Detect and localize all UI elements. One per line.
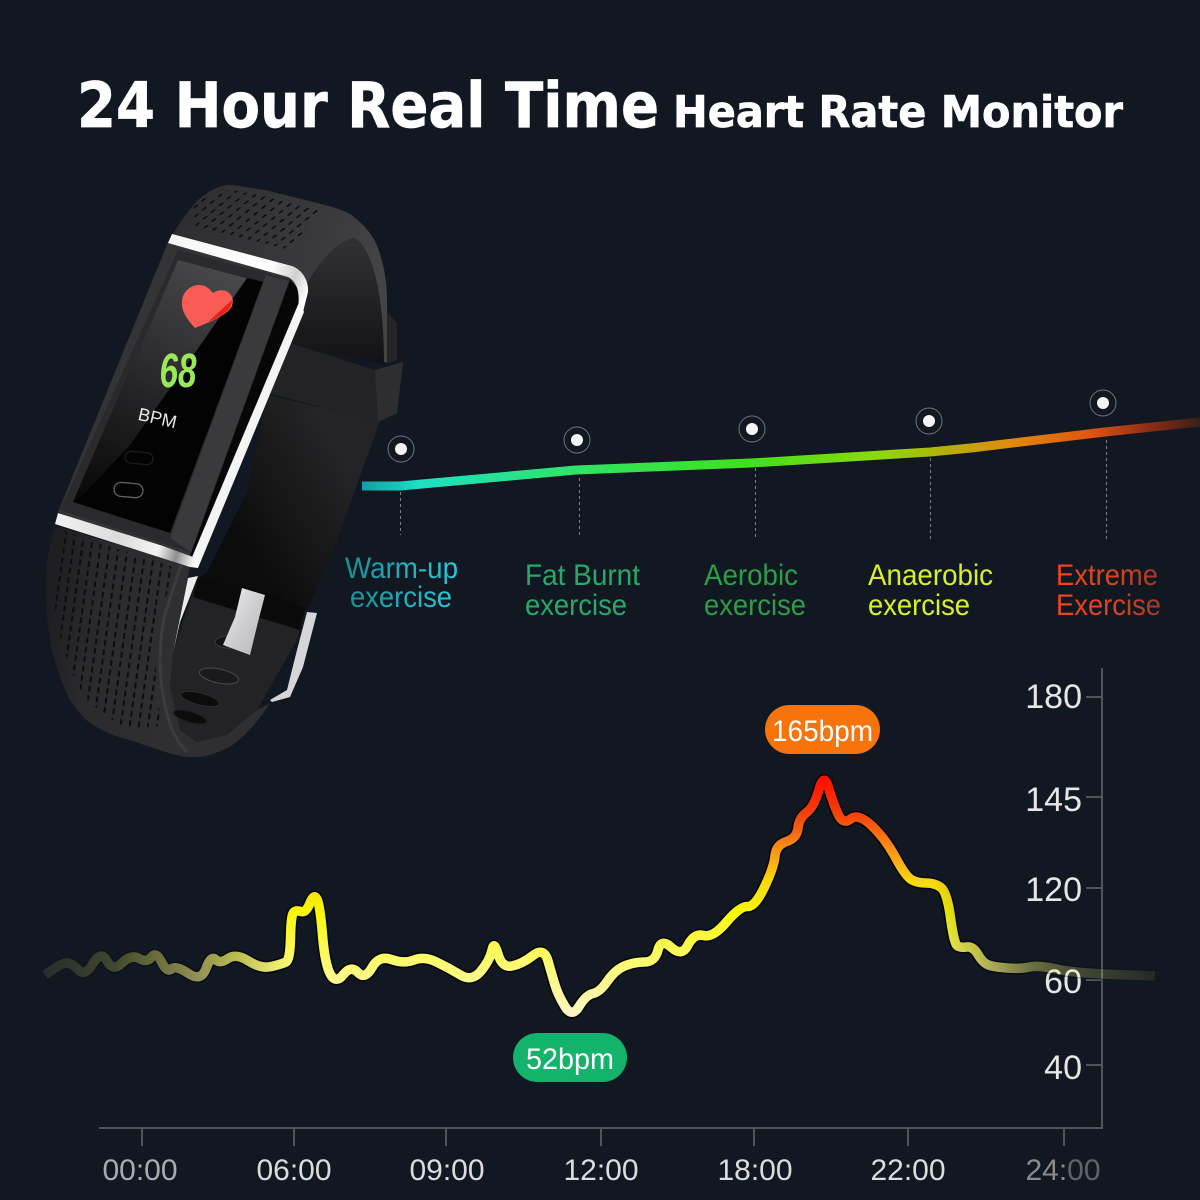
callout: 52bpm low: 52bpm xyxy=(526,1043,614,1076)
dashed drop lines xyxy=(400,440,1106,540)
label: fat burnt exercise: Fat Burnt xyxy=(525,559,641,592)
label: anaerobic exercise: exercise xyxy=(868,589,970,622)
title xyxy=(77,69,1123,142)
side dark strip xyxy=(190,280,305,566)
watch module body xyxy=(58,242,304,566)
zone markers xyxy=(388,390,1116,462)
white side edge xyxy=(190,300,304,568)
heart icon xyxy=(182,285,233,328)
BPM label: BPM xyxy=(136,404,179,432)
label: fat burnt exercise xyxy=(525,559,641,622)
label: extreme exercise: Extreme xyxy=(1056,559,1158,592)
back strap xyxy=(197,395,380,610)
y axis labels: 40 xyxy=(1044,1049,1082,1087)
label: anaerobic exercise: Anaerobic xyxy=(868,559,993,592)
callout: 165bpm peak xyxy=(765,705,880,754)
heart rate reading: 68 xyxy=(160,345,197,398)
top silver cap xyxy=(168,234,308,312)
heart rate curve xyxy=(45,780,1155,1012)
x axis labels: 06:00 xyxy=(256,1154,332,1187)
axes xyxy=(99,668,1102,1146)
buckle clip xyxy=(215,588,265,655)
label: extreme exercise xyxy=(1056,559,1161,622)
callout: 52bpm low xyxy=(513,1033,627,1082)
callout: 165bpm peak: 165bpm xyxy=(772,715,873,748)
arch inner surface xyxy=(290,238,385,364)
zone gradient line xyxy=(362,422,1200,486)
x axis labels xyxy=(102,1154,1101,1187)
lower band rim highlight xyxy=(160,565,187,752)
x axis labels: 09:00 xyxy=(409,1154,485,1187)
x axis labels: 18:00 xyxy=(717,1154,793,1187)
y axis labels: 180 xyxy=(1025,678,1082,716)
buckle frame left xyxy=(173,576,198,653)
title: 24 Hour Real Time xyxy=(77,69,659,142)
x axis labels: 24:00 xyxy=(1025,1154,1101,1187)
label: aerobic exercise: exercise xyxy=(704,589,806,622)
x axis labels: 12:00 xyxy=(563,1154,639,1187)
upper band outer surface xyxy=(172,185,387,362)
keeper loop xyxy=(268,343,403,422)
buckle frame right xyxy=(270,612,317,702)
screen bezel shade xyxy=(60,250,292,555)
lower band inner surface xyxy=(170,580,305,742)
fitness band product image xyxy=(46,185,403,757)
rear pad behind keeper xyxy=(385,310,397,364)
x axis labels: 00:00 xyxy=(102,1154,178,1187)
x axis labels: 22:00 xyxy=(870,1154,946,1187)
lower band dot texture xyxy=(54,530,176,728)
label: anaerobic exercise xyxy=(868,559,993,622)
side bevel xyxy=(170,275,289,552)
label: warm-up exercise: exercise xyxy=(350,581,452,614)
title: Heart Rate Monitor xyxy=(673,87,1123,138)
y axis labels xyxy=(1025,678,1082,1087)
panel: exercise zones xyxy=(345,390,1200,622)
y axis labels: 145 xyxy=(1025,781,1082,819)
label: fat burnt exercise: exercise xyxy=(525,589,627,622)
y axis labels: 60 xyxy=(1044,963,1082,1001)
label: warm-up exercise: Warm-up xyxy=(345,552,458,585)
strap holes xyxy=(172,665,240,726)
screen glass xyxy=(73,260,263,533)
label: extreme exercise: Exercise xyxy=(1056,589,1161,622)
screen button marks xyxy=(113,451,153,498)
upper band dot texture xyxy=(193,190,322,250)
label: aerobic exercise: Aerobic xyxy=(704,559,798,592)
screen reflection xyxy=(73,260,247,502)
buckle bar xyxy=(193,580,305,630)
chart: 24 hour heart rate xyxy=(45,668,1155,1187)
y axis labels: 120 xyxy=(1025,871,1082,909)
label: warm-up exercise xyxy=(345,552,458,614)
label: aerobic exercise xyxy=(704,559,806,622)
bottom silver cap xyxy=(55,513,198,568)
lower band outer surface xyxy=(46,526,270,757)
